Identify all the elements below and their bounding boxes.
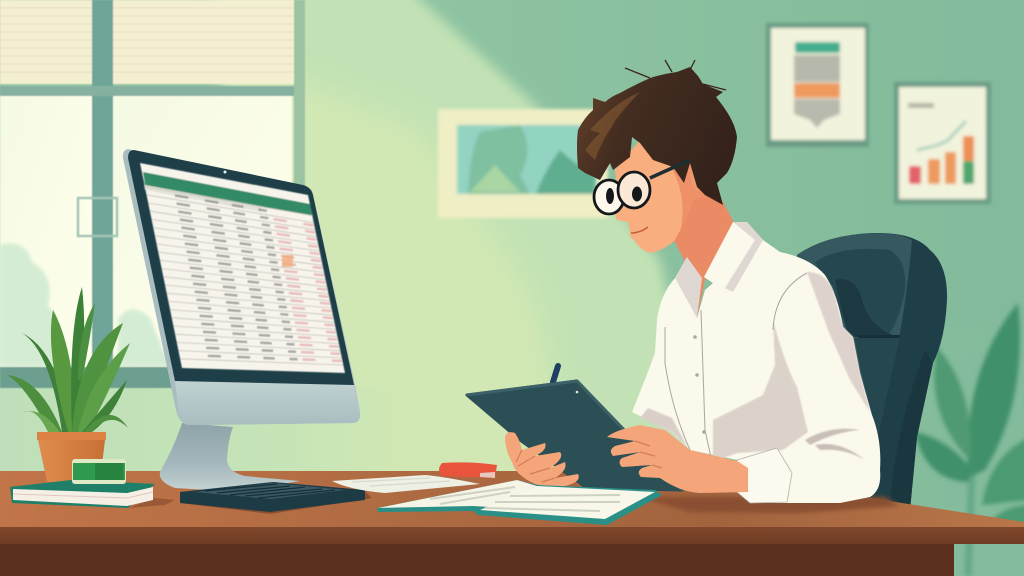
desk front edge	[0, 527, 1024, 544]
highlighted cell	[282, 255, 293, 267]
desk top surface	[0, 471, 1024, 528]
hair strands	[625, 60, 726, 90]
tablet	[467, 381, 682, 490]
monitor casing	[123, 149, 360, 425]
desk	[0, 471, 1024, 576]
book pages	[13, 487, 153, 506]
glasses	[594, 160, 690, 214]
window frame	[0, 0, 305, 388]
book cover	[10, 480, 155, 508]
pot	[37, 432, 106, 482]
monitor chin	[175, 381, 360, 425]
notebook cover	[377, 480, 662, 525]
monitor stand	[160, 423, 300, 492]
right hand and forearm	[607, 425, 748, 493]
keyboard body	[180, 482, 365, 512]
ribbon header	[143, 172, 313, 216]
wall poster: stacked funnel	[766, 23, 869, 147]
mouth	[631, 227, 648, 233]
monitor bezel	[128, 150, 354, 385]
shirt shadows	[640, 272, 870, 462]
temple arm	[650, 160, 690, 178]
spreadsheet rows	[145, 187, 343, 365]
neck	[660, 190, 738, 318]
background plant right	[915, 303, 1024, 576]
right lens	[618, 172, 650, 208]
left hand	[505, 432, 579, 487]
left page	[378, 480, 537, 508]
buttons	[693, 335, 706, 434]
spreadsheet screen	[140, 163, 345, 373]
tree silhouette outside	[0, 243, 170, 367]
keyboard	[180, 482, 372, 514]
red eraser book	[439, 462, 497, 478]
green book stack	[10, 480, 175, 508]
wall picture: landscape	[438, 109, 608, 218]
computer monitor	[123, 149, 360, 425]
head	[577, 60, 737, 253]
ear	[690, 153, 712, 191]
shirt cuff	[737, 448, 792, 503]
face shadow	[672, 160, 707, 232]
open notebook	[377, 480, 662, 525]
right page	[480, 486, 655, 519]
collar right	[704, 222, 763, 296]
window panes	[0, 95, 292, 367]
potted plant	[7, 287, 130, 482]
window	[0, 0, 305, 388]
paper sheet	[332, 475, 480, 493]
webcam	[224, 170, 226, 174]
notebook writing	[430, 487, 620, 511]
person	[577, 60, 880, 503]
pot rim	[37, 432, 106, 440]
desk shadow under arm	[640, 497, 900, 513]
keyboard shadow	[180, 492, 372, 514]
shirt seams and placket	[665, 273, 807, 462]
hair	[577, 67, 737, 205]
keys	[195, 483, 345, 499]
eyes	[606, 188, 614, 204]
green tape box	[72, 459, 126, 484]
shadow	[128, 498, 175, 508]
window blinds	[0, 0, 298, 84]
office chair	[797, 233, 947, 510]
white shirt	[632, 222, 880, 503]
face	[615, 140, 707, 253]
leaves	[7, 287, 130, 432]
left lens	[594, 180, 624, 214]
wall poster: bar chart	[894, 82, 991, 204]
collar left	[675, 257, 702, 318]
eyebrow	[628, 175, 645, 178]
shirt base	[632, 240, 880, 503]
hair highlights	[585, 92, 640, 160]
tablet pen	[553, 366, 558, 382]
desk leg panel	[0, 543, 954, 576]
